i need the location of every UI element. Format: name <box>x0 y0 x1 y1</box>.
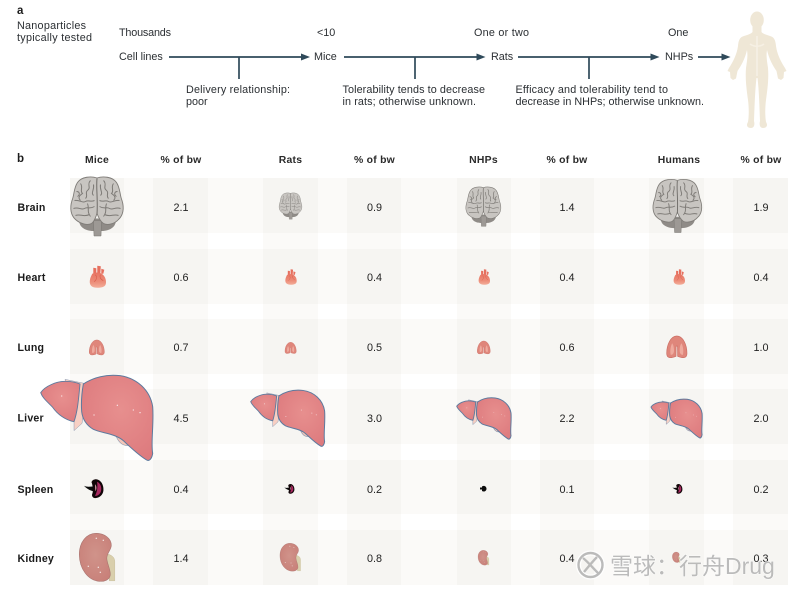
icon: mice liver <box>41 375 153 460</box>
value: mice liver: 4.5 <box>173 413 189 425</box>
column headers: % of bw <box>740 155 782 166</box>
column headers <box>85 155 782 166</box>
icon: rat kidney <box>280 543 301 571</box>
value: NHP heart: 0.4 <box>559 272 575 284</box>
value: mice heart: 0.6 <box>173 272 189 284</box>
icon: human heart <box>674 269 685 285</box>
arrow: cell lines to mice <box>169 54 310 79</box>
icon: rat liver <box>251 390 325 446</box>
arrow: rats to NHPs <box>518 54 660 79</box>
icon: NHP lung <box>477 341 490 354</box>
value: rat kidney: 0.8 <box>367 553 382 565</box>
icon: human lung <box>667 336 687 358</box>
value: mice spleen: 0.4 <box>173 484 189 496</box>
icon: NHP spleen <box>480 486 486 492</box>
value: human liver: 2.0 <box>753 413 769 425</box>
icon: rat brain <box>279 193 302 219</box>
row label: lung: Lung <box>18 342 44 354</box>
value: human kidney: 0.3 <box>753 553 769 565</box>
icon: human liver <box>651 399 702 438</box>
icon: human body <box>728 12 786 128</box>
arrow: NHPs to humans <box>698 54 730 60</box>
icon: human brain <box>653 179 702 233</box>
text: nanoparticles typically tested: typically tested <box>17 32 92 44</box>
row: kidney <box>18 533 769 581</box>
table background bands <box>70 178 788 585</box>
text: delivery relationship note: poor <box>186 96 208 108</box>
row label: kidney: Kidney <box>18 553 54 565</box>
icon: NHP kidney <box>478 550 489 565</box>
row: liver <box>18 375 769 460</box>
value: mice lung: 0.7 <box>173 342 189 354</box>
icon: mice brain <box>71 177 123 236</box>
value: human lung: 1.0 <box>753 342 769 354</box>
icon: rat heart <box>285 269 297 285</box>
icon: mice spleen <box>84 479 103 498</box>
icon: NHP heart <box>479 269 490 285</box>
column headers: % of bw <box>354 155 396 166</box>
column headers: % of bw <box>546 155 588 166</box>
text: tolerability note: Tolerability tends to decrease <box>342 84 485 96</box>
value: NHP brain: 1.4 <box>559 202 575 214</box>
panel label: b: b <box>17 153 24 165</box>
value: rat spleen: 0.2 <box>367 484 382 496</box>
counts row: number of nanoparticles tested: One <box>668 27 688 39</box>
counts row: number of nanoparticles tested: <10 <box>317 27 335 39</box>
value: rat lung: 0.5 <box>367 342 382 354</box>
watermark: logo and text: 雪球：行舟Drug <box>610 553 775 579</box>
icon: rat lung <box>285 342 296 354</box>
text: nanoparticles typically tested <box>17 20 92 44</box>
value: rat liver: 3.0 <box>367 413 382 425</box>
text: efficacy note: Efficacy and tolerability tend to <box>516 84 668 96</box>
icon: human spleen <box>672 484 682 494</box>
value: NHP liver: 2.2 <box>559 413 575 425</box>
arrow: mice to rats <box>344 54 486 79</box>
column headers: % of bw <box>160 155 202 166</box>
text: tolerability note: in rats; otherwise unknown. <box>342 96 476 108</box>
icon: human kidney <box>672 552 680 563</box>
models row: model names: NHPs <box>665 51 694 63</box>
row: brain <box>18 177 769 236</box>
row label: liver: Liver <box>18 412 44 424</box>
counts row: number of nanoparticles tested: Thousands <box>119 27 172 39</box>
row: spleen <box>18 479 769 498</box>
text: efficacy note <box>516 84 704 108</box>
column headers: Rats <box>279 155 302 166</box>
icon: rat spleen <box>284 484 294 494</box>
icon: mice kidney <box>79 533 115 581</box>
models row: model names: Cell lines <box>119 51 163 63</box>
column headers: Humans <box>658 155 700 166</box>
text: nanoparticles typically tested: Nanoparticles <box>17 20 87 32</box>
value: human heart: 0.4 <box>753 272 769 284</box>
models row: model names: Mice <box>314 51 337 63</box>
value: human spleen: 0.2 <box>753 484 769 496</box>
text: efficacy note: decrease in NHPs; otherwise unknown. <box>516 96 704 108</box>
counts row: number of nanoparticles tested: One or two <box>474 27 529 39</box>
column headers: NHPs <box>469 155 498 166</box>
row label: brain: Brain <box>18 202 46 214</box>
models row: model names <box>119 51 694 63</box>
value: NHP spleen: 0.1 <box>559 484 575 496</box>
value: rat brain: 0.9 <box>367 202 382 214</box>
row: heart <box>18 266 769 288</box>
icon: mice heart <box>90 266 106 288</box>
icon: NHP liver <box>457 398 511 439</box>
text: delivery relationship note: Delivery relationship: <box>186 84 290 96</box>
text: delivery relationship note <box>186 84 290 108</box>
value: NHP lung: 0.6 <box>559 342 575 354</box>
value: mice kidney: 1.4 <box>173 553 189 565</box>
text: tolerability note <box>342 84 485 108</box>
row label: heart: Heart <box>18 272 46 284</box>
icon: mice lung <box>89 340 104 355</box>
value: NHP kidney: 0.4 <box>559 553 575 565</box>
value: mice brain: 2.1 <box>173 202 189 214</box>
value: human brain: 1.9 <box>753 202 769 214</box>
models row: model names: Rats <box>491 51 514 63</box>
row: lung <box>18 336 769 358</box>
column headers: Mice <box>85 155 109 166</box>
counts row: number of nanoparticles tested <box>119 27 688 39</box>
panel label: a: a <box>17 5 24 17</box>
row label: spleen: Spleen <box>18 484 53 496</box>
icon: NHP brain <box>466 187 501 226</box>
value: rat heart: 0.4 <box>367 272 382 284</box>
